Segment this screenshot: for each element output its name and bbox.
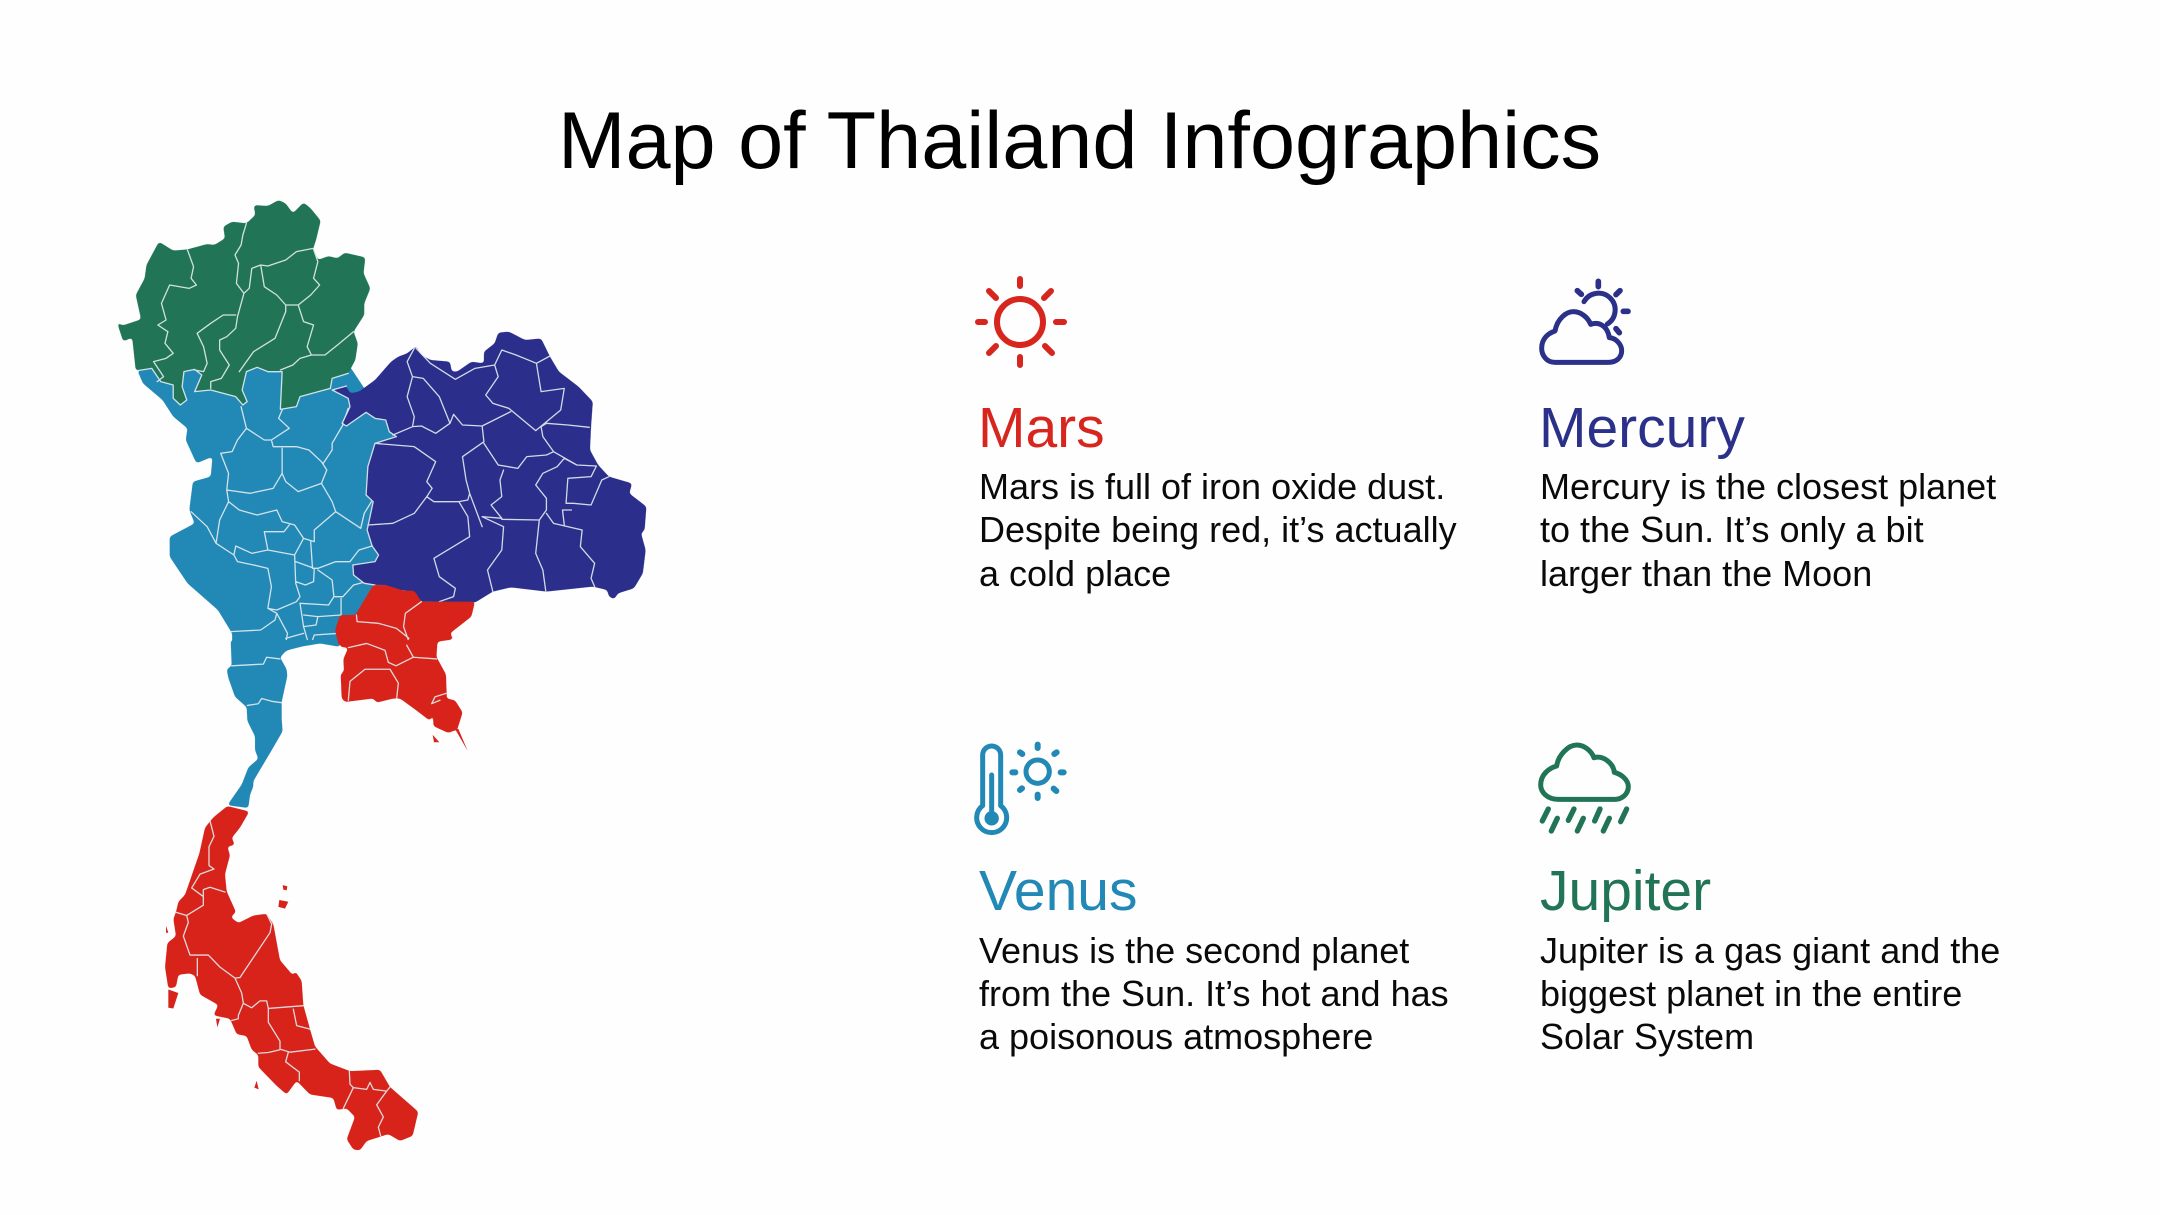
text: Mars description: a cold place xyxy=(979,553,1171,594)
panel: Venus xyxy=(977,745,1449,1057)
text: Mars description: Mars is full of iron oxide dust. xyxy=(979,466,1445,507)
map region: north (green) xyxy=(116,200,370,409)
map of Thailand xyxy=(116,200,646,1150)
text: Mercury description: Mercury is the closest planet xyxy=(1540,466,1996,507)
map region: central (light blue) xyxy=(137,347,396,808)
panel: Mercury xyxy=(1539,281,1996,594)
icon: thermometer and sun xyxy=(977,745,1064,833)
heading: Venus: Venus xyxy=(979,859,1137,923)
text: Mercury description: to the Sun. It’s only a bit xyxy=(1540,509,1924,550)
heading: Mercury: Mercury xyxy=(1539,396,1745,460)
panel: Jupiter xyxy=(1540,745,2000,1057)
heading: Jupiter: Jupiter xyxy=(1540,859,1711,923)
text: Venus description: a poisonous atmosphere xyxy=(979,1016,1373,1057)
text: Jupiter description: Solar System xyxy=(1540,1016,1754,1057)
panel: Mars xyxy=(978,279,1457,594)
text: Jupiter description: biggest planet in the entire xyxy=(1540,973,1962,1014)
title: Map of Thailand Infographics xyxy=(558,96,1601,186)
map region: east and south (red) xyxy=(165,585,475,1150)
text: Jupiter description: Jupiter is a gas giant and the xyxy=(1540,930,2000,971)
heading: Mars: Mars xyxy=(978,396,1105,460)
text: Mercury description: larger than the Moon xyxy=(1540,553,1872,594)
text: Mars description: Despite being red, it’s actually xyxy=(979,509,1457,550)
icon: sun behind cloud xyxy=(1542,281,1628,362)
icon: sun xyxy=(978,279,1064,365)
icon: rain cloud xyxy=(1541,745,1628,831)
text: Venus description: Venus is the second planet xyxy=(979,930,1409,971)
text: Venus description: from the Sun. It’s hot and has xyxy=(979,973,1449,1014)
map region: northeast (dark blue) xyxy=(332,332,646,603)
